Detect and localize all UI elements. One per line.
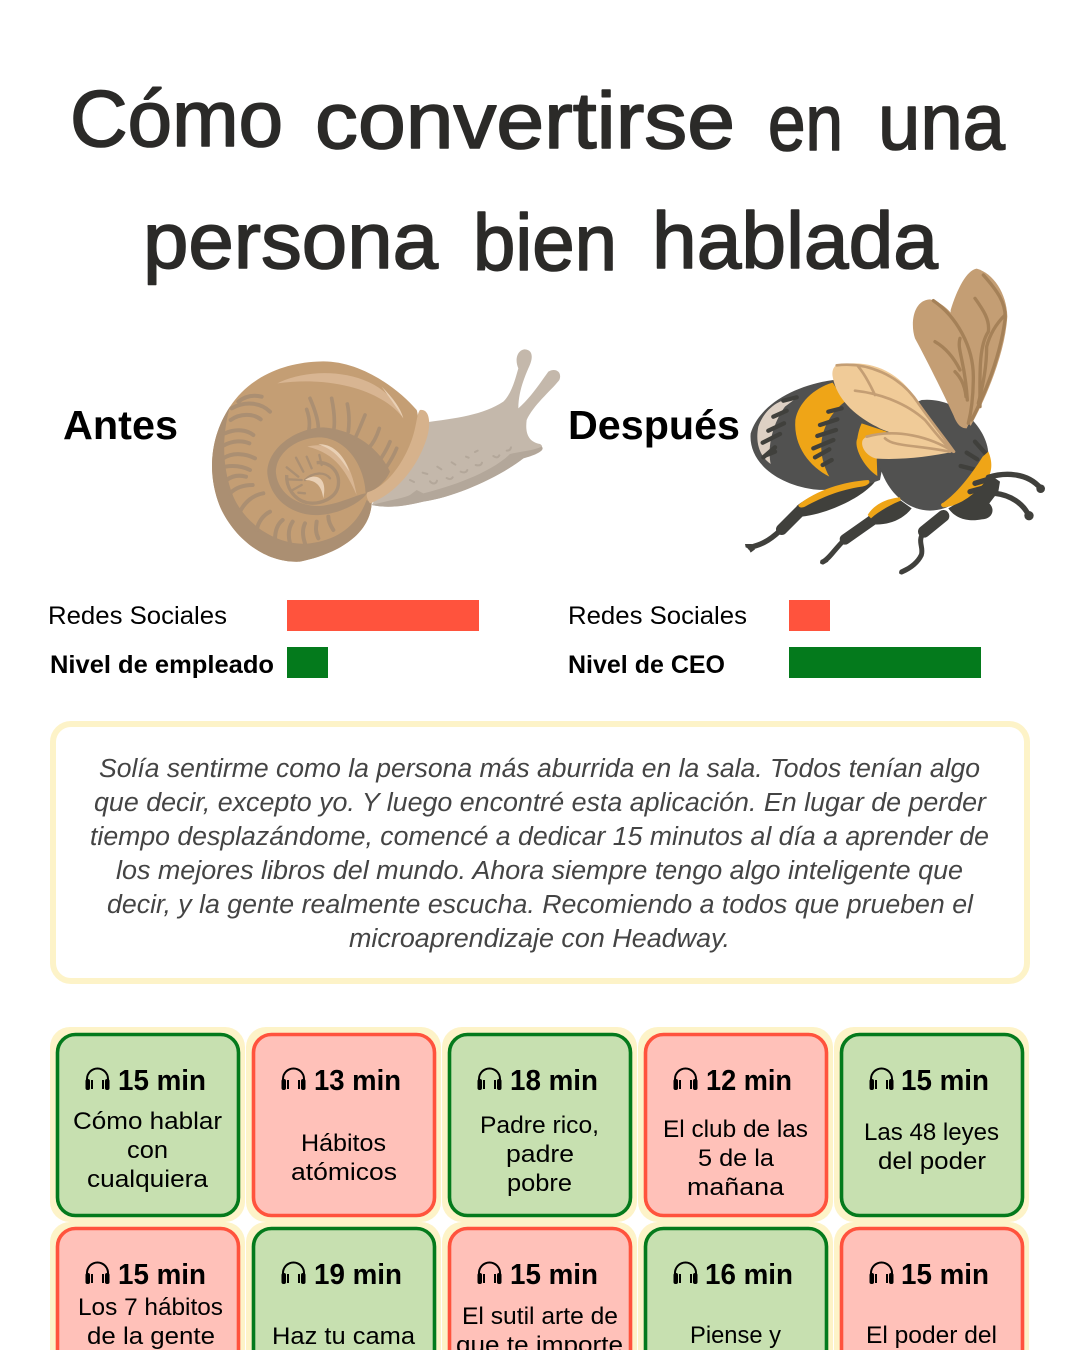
bar chart: después [568,600,981,679]
card: Cómo hablar con cualquiera: Cómo hablar [73,1108,222,1135]
card: Cómo hablar con cualquiera: 15 min [118,1065,206,1097]
bar chart: después: Nivel de CEO [568,651,725,679]
card: Piense y: Piense y [690,1322,781,1349]
card: Padre rico, padre pobre: padre [506,1141,574,1168]
card: Padre rico, padre pobre: pobre [507,1170,572,1197]
card: Las 48 leyes del poder: Las 48 leyes [864,1119,999,1146]
panel: testimonial quote: tiempo desplazándome, comencé a dedicar 15 minutos al día a aprender de [90,823,989,851]
panel: testimonial quote: los mejores libros del mundo. Ahora siempre tengo algo inteligente que [116,857,963,885]
card: El poder del [834,1222,1029,1350]
card: Hábitos atómicos [246,1027,441,1222]
icon: snail [212,349,560,562]
bar chart: antes: Redes Sociales [48,602,227,630]
card: El poder del: 15 min [901,1259,989,1291]
bar chart: antes: Nivel de empleado [50,651,274,679]
title: persona [143,196,439,285]
card: El sutil arte de que te importe: El sutil arte de [462,1303,618,1330]
card: Haz tu cama: 19 min [314,1259,402,1291]
card: El sutil arte de que te importe [442,1222,637,1350]
card: Padre rico, padre pobre [442,1027,637,1222]
card: El club de las 5 de la mañana: mañana [687,1174,785,1201]
card: Cómo hablar con cualquiera: cualquiera [87,1166,209,1193]
card: Haz tu cama: Haz tu cama [272,1323,416,1350]
bar chart: antes [48,600,479,679]
title: bien [473,198,617,287]
title [70,74,1005,287]
panel: testimonial quote: decir, y la gente realmente escucha. Recomiendo a todos que prueben el [107,891,974,919]
card: Los 7 hábitos de la gente: de la gente [87,1323,215,1350]
card: El club de las 5 de la mañana: 12 min [706,1065,792,1097]
bee thorax [878,400,988,511]
card: Las 48 leyes del poder [834,1027,1029,1222]
panel: testimonial quote: microaprendizaje con Headway. [349,925,730,953]
panel: testimonial quote [53,724,1027,981]
card: Hábitos atómicos: 13 min [314,1065,401,1097]
card: Piense y [638,1222,833,1350]
title: hablada [652,196,939,285]
card: Padre rico, padre pobre: 18 min [510,1065,598,1097]
grid: book cards [50,1027,1029,1350]
card: Las 48 leyes del poder: 15 min [901,1065,989,1097]
card: El poder del: El poder del [866,1322,997,1349]
card: Hábitos atómicos: Hábitos [301,1130,386,1157]
card: Hábitos atómicos: atómicos [291,1159,397,1186]
bee head and antennae [948,473,1000,520]
heading: Después: Después [568,402,740,448]
card: Haz tu cama [246,1222,441,1350]
card: Piense y: 16 min [705,1259,793,1291]
bee wings [951,269,1007,426]
bee legs [745,482,912,575]
panel: testimonial quote: que decir, excepto yo. Y luego encontré esta aplicación. En lugar de perder [94,789,988,817]
bee abdomen [751,380,890,490]
card: Los 7 hábitos de la gente: 15 min [118,1259,206,1291]
heading: Antes: Antes [63,402,178,448]
icon: bumblebee [745,269,1045,575]
card: Las 48 leyes del poder: del poder [878,1148,986,1175]
card: Cómo hablar con cualquiera: con [127,1137,168,1164]
card: El club de las 5 de la mañana: El club de las [663,1116,808,1143]
card: Cómo hablar con cualquiera [50,1027,245,1222]
card: Los 7 hábitos de la gente: Los 7 hábitos [78,1294,223,1321]
card: Los 7 hábitos de la gente [50,1222,245,1350]
title: en [768,78,843,167]
card: El club de las 5 de la mañana [638,1027,833,1222]
title: convertirse [315,76,735,165]
card: El sutil arte de que te importe: 15 min [510,1259,598,1291]
card: Padre rico, padre pobre: Padre rico, [480,1112,599,1139]
card: El club de las 5 de la mañana: 5 de la [698,1145,775,1172]
title: una [878,77,1005,166]
title: Cómo [70,74,283,163]
bar chart: después: Redes Sociales [568,602,747,630]
panel: testimonial quote: Solía sentirme como la persona más aburrida en la sala. Todos tenían algo [99,755,980,783]
